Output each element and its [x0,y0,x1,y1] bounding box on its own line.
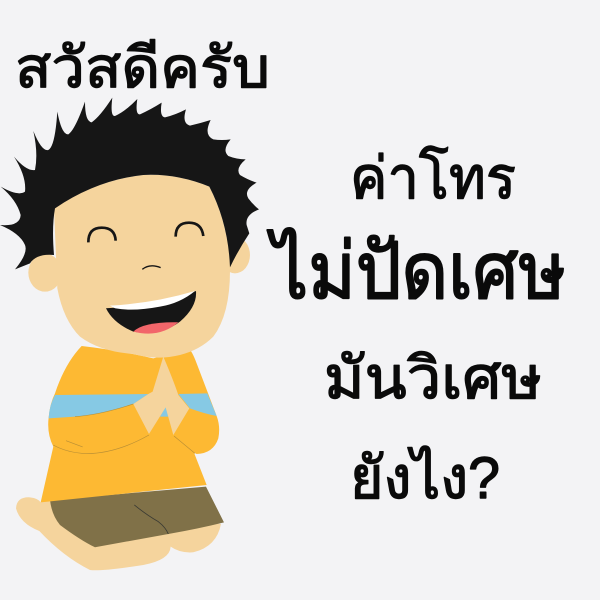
right eye [176,223,203,237]
shorts crease [134,505,168,534]
heading line 2: ไม่ปัดเศษ [266,227,566,315]
praying hands [133,357,189,435]
legs and feet [16,497,221,570]
heading line 4: ยังไง? [350,445,500,511]
sleeve lines [53,404,195,454]
tongue [133,322,178,334]
body [16,346,224,570]
face [54,175,230,358]
left eye [88,228,116,242]
shorts [50,487,224,547]
character: greeting boy [0,98,259,570]
teeth [110,291,195,310]
head [0,98,259,358]
heading line 3: มันวิเศษ [324,346,542,411]
nose [142,266,161,269]
heading line 1: ค่าโทร [350,145,516,211]
heading: greeting: สวัสดีครับ [15,36,270,99]
mouth [106,291,196,333]
shirt [41,346,219,502]
shirt stripe left [49,394,148,418]
shirt stripe centre [160,407,168,417]
right ear [220,237,250,273]
hair [0,98,259,269]
left ear [28,254,62,292]
shirt stripe right [178,393,217,416]
